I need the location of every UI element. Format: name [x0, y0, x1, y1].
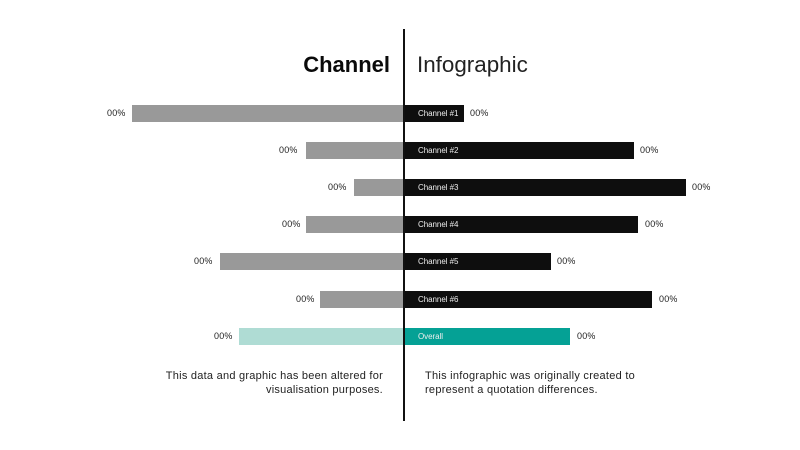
left note: This data and graphic has been altered for: [166, 370, 383, 382]
right value 3: 00%: [692, 182, 711, 192]
right value overall: 00%: [577, 331, 596, 341]
left bar 1: [132, 105, 404, 122]
left value 6: 00%: [296, 294, 315, 304]
right bar overall: Overall: [418, 332, 443, 341]
left bar 2: [306, 142, 404, 159]
right value 6: 00%: [659, 294, 678, 304]
right value 4: 00%: [645, 219, 664, 229]
left bar 3: [354, 179, 404, 196]
right bar 6: [404, 291, 652, 308]
right value 2: 00%: [640, 145, 659, 155]
left bar 6: [320, 291, 404, 308]
right bar 1: Channel #1: [418, 109, 458, 118]
left bar 5: [220, 253, 404, 270]
left value 5: 00%: [194, 256, 213, 266]
row: Channel #4: [282, 216, 664, 233]
row: Channel #5: [194, 253, 576, 270]
right bar 3: Channel #3: [418, 183, 458, 192]
row: Channel #3: [328, 179, 711, 196]
right bar 6: Channel #6: [418, 295, 458, 304]
center divider line: [403, 29, 405, 421]
right bar 4: Channel #4: [418, 220, 458, 229]
left value 3: 00%: [328, 182, 347, 192]
right bar 2: Channel #2: [418, 146, 458, 155]
row: Overall: [214, 328, 596, 345]
right note: [425, 370, 635, 396]
left bar 4: [306, 216, 404, 233]
left note: visualisation purposes.: [266, 384, 383, 396]
row: Channel #2: [279, 142, 659, 159]
left value 4: 00%: [282, 219, 301, 229]
right value 1: 00%: [470, 108, 489, 118]
left value 1: 00%: [107, 108, 126, 118]
title: Infographic: Infographic: [417, 52, 528, 77]
right bar 4: [404, 216, 638, 233]
left value overall: 00%: [214, 331, 233, 341]
left note: [166, 370, 383, 396]
right bar 1: [404, 105, 464, 122]
right note: This infographic was originally created to: [425, 370, 635, 382]
title: Channel: Channel: [303, 52, 390, 77]
right note: represent a quotation differences.: [425, 384, 598, 396]
left value 2: 00%: [279, 145, 298, 155]
row: Channel #6: [296, 291, 678, 308]
right bar 5: Channel #5: [418, 257, 458, 266]
row: Channel #1: [107, 105, 489, 122]
right bar 3: [404, 179, 686, 196]
left bar overall: [239, 328, 404, 345]
right value 5: 00%: [557, 256, 576, 266]
right bar 2: [404, 142, 634, 159]
right bar 5: [404, 253, 551, 270]
right bar overall: [404, 328, 570, 345]
